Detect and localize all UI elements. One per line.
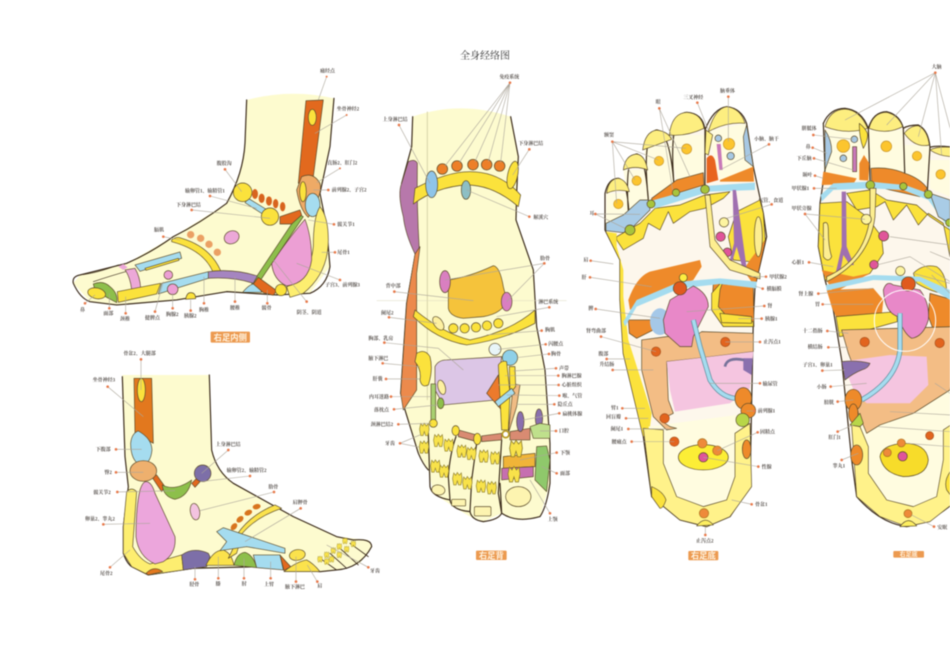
callout: 胼胝体: 胼胝体 [802,125,817,132]
callout: 甲状旁腺: 甲状旁腺 [792,205,812,212]
callout: 腹股沟: 腹股沟 [217,160,232,167]
callout: 眼: 眼 [656,98,661,105]
callout: 臂1: 臂1 [611,404,619,411]
foot outline: sole [605,107,767,527]
callout: 子宫3、前列腺3: 子宫3、前列腺3 [325,282,360,289]
medial reflex zones [87,100,328,303]
callout: 隐丘点: 隐丘点 [558,401,574,408]
callout: 坐骨神经2 [315,106,360,133]
callout: 小脑、脑干 [720,136,779,170]
panel: right foot medial side [73,68,367,343]
callout: 腋下淋巴 [285,557,305,590]
callout: 髋关节1 [308,220,355,228]
second sole reflex zones [818,123,950,527]
callout: 肝囊 [373,376,420,383]
callout: 声带 [513,365,569,372]
callout: 膀胱: 膀胱 [824,399,834,406]
callout: 鼻: 鼻 [806,143,811,150]
callout: 颞叶: 颞叶 [802,172,812,179]
callout: 下丘脑: 下丘脑 [797,155,812,162]
callout: 额窦: 额窦 [603,132,614,139]
callout: 子宫1、卵巢1: 子宫1、卵巢1 [803,362,833,369]
callout: 脑垂体 [720,88,735,142]
callout: 胸骨: 胸骨 [551,351,561,358]
callout: 痛经点 [318,68,336,100]
callout: 牙齿 [327,545,380,574]
callout: 阴茎、阴道: 阴茎、阴道 [297,309,322,316]
callout: 直肠2、肛门2 [317,160,358,183]
callout: 睾丸1 [833,453,858,469]
callout: 腹部: 腹部 [598,351,608,358]
callout: 上颚: 上颚 [548,516,559,523]
callout: 固精点: 固精点 [760,428,776,435]
callout: 阑尾1: 阑尾1 [611,426,624,433]
callout: 三叉神经 [683,94,708,130]
callout: 胰腺2 [184,300,197,319]
callout: 颈淋巴结2: 颈淋巴结2 [371,421,394,428]
callout: 尾骨1 [322,249,350,256]
callout: 小肠: 小肠 [817,383,827,390]
callout: 升结肠 [599,361,653,371]
callout: 上臂 [264,562,274,588]
callout: 肋骨 [445,255,550,302]
callout: 面部 [542,467,570,477]
callout: 肩 [583,257,613,264]
callout: 下丘脑 [797,155,853,170]
callout: 直肠2、肛门2: 直肠2、肛门2 [327,160,358,167]
callout: 鼻: 鼻 [80,307,85,314]
callout: 膈肌 [154,227,180,240]
callout: 面部 [103,293,113,317]
callout: 解溪穴 [467,190,548,221]
callout: 输卵管1、输精管1: 输卵管1、输精管1 [185,188,225,195]
callout: 膀胱 [824,399,853,406]
callout: 口腔 [540,428,570,435]
tag: 右足底: 右足底 [691,551,716,561]
callout: 喉、气管: 喉、气管 [562,392,582,399]
callout: 上颚 [530,480,559,523]
callout: 肋骨 [200,484,278,511]
callout: 阑尾1 [611,426,668,433]
callout: 大脑 [845,63,950,155]
callout: 腹部 [598,351,630,360]
callout: 胸淋巴腺 [505,372,582,379]
callout: 下身淋巴结: 下身淋巴结 [176,202,201,209]
panel: cropped second sole [792,63,950,559]
callout: 卵巢2、睾丸2: 卵巢2、睾丸2 [85,516,115,523]
callout: 胼胝体 [802,125,853,139]
callout: 骨盆2、大腿部: 骨盆2、大腿部 [123,350,156,357]
callout: 额窦 [603,132,686,203]
callout: 下颚 [520,450,571,460]
callout: 胸肌: 胸肌 [545,327,555,334]
foot outline: second sole [818,108,950,527]
callout: 脾: 脾 [588,305,593,312]
callout: 胸椎: 胸椎 [199,307,209,314]
callout: 淋巴系统 [497,298,559,317]
callout: 肋骨: 肋骨 [268,484,278,491]
callout: 止泻点2 [696,527,714,544]
tag: 右足底 second sole [893,551,924,559]
callout: 大脑: 大脑 [932,63,942,70]
callout: 喉、气管 [507,392,582,399]
callout: 安眠: 安眠 [937,524,947,531]
callout: 肾弯曲部 [586,327,656,352]
callout: 淋巴系统: 淋巴系统 [538,298,559,305]
callout: 耳 [589,210,640,228]
callout: 胰腺1: 胰腺1 [765,316,778,323]
callout: 胫骨 [189,567,199,588]
callout: 落枕点: 落枕点 [374,407,390,414]
callout: 输卵管2、输精管2 [200,467,267,482]
callout: 气管、食道: 气管、食道 [758,197,783,204]
callout: 睾丸1: 睾丸1 [833,462,846,469]
callout: 子宫3、前列腺3 [297,263,360,289]
callout: 升结肠: 升结肠 [599,361,614,368]
callout: 面部: 面部 [560,470,570,477]
callout: 颈淋巴结2 [371,421,432,428]
callout: 肩 [307,565,322,590]
callout: 腹股沟 [217,160,242,192]
callout: 腋下淋巴 [368,355,420,367]
callout: 阴茎、阴道 [273,260,322,316]
callout: 胸部、乳房: 胸部、乳房 [368,335,393,342]
dorsal reflex zones [400,159,550,516]
callout: 上臂: 上臂 [264,581,274,588]
callout: 横膈膜 [755,286,782,293]
callout: 肋骨: 肋骨 [540,255,550,262]
callout: 牙齿: 牙齿 [370,567,380,574]
foot outline: lateral [122,375,372,575]
callout: 阑尾2: 阑尾2 [381,309,394,316]
callout: 上身淋巴结: 上身淋巴结 [216,441,241,448]
callout: 下腹部: 下腹部 [96,446,111,453]
callout: 甲状旁腺 [792,205,865,240]
panel: right foot lateral side [85,350,380,590]
callout: 髋骨 [262,290,272,311]
callout: 心脏组织 [498,382,583,389]
panel: right foot sole [582,88,787,561]
callout: 臂1 [611,404,645,411]
callout: 内耳迷路: 内耳迷路 [369,393,389,400]
callout: 坐骨神经2: 坐骨神经2 [337,106,360,113]
callout: 肩胛骨: 肩胛骨 [293,499,308,506]
callout: 髋关节2: 髋关节2 [93,489,111,496]
callout: 鼻 [80,295,95,314]
callout: 肾弯曲部: 肾弯曲部 [586,327,606,334]
callout: 肘: 肘 [242,580,247,587]
callout: 尾骨2: 尾骨2 [100,570,113,577]
callout: 脑垂体: 脑垂体 [720,88,735,95]
callout: 胸部、乳房 [368,335,463,370]
callout: 止泻点1 [725,338,781,345]
callout: 三叉神经: 三叉神经 [683,94,704,101]
callout: 口腔: 口腔 [559,428,570,435]
callout: 心脏组织: 心脏组织 [562,382,583,389]
callout: 腋下淋巴: 腋下淋巴 [368,355,388,362]
callout: 落枕点 [374,405,438,414]
callout: 腋下淋巴: 腋下淋巴 [285,583,305,590]
panel: right foot dorsal side [368,73,583,560]
callout: 髋关节2 [93,489,175,496]
tag: 右足底 second sole: 右足底 [900,551,918,559]
callout: 甲状腺1 [792,185,837,192]
callout: 背中部 [386,282,473,301]
callout: 肩胛骨 [245,499,308,542]
callout: 肘 [242,558,247,587]
callout: 腰椎: 腰椎 [230,304,240,311]
callout: 背中部: 背中部 [386,282,401,289]
callout: 健脾点 [145,282,163,321]
callout: 胰腺1 [738,316,778,323]
callout: 输尿管: 输尿管 [763,380,778,387]
callout: 胸椎 [199,277,209,314]
callout: 胃: 胃 [815,301,820,308]
callout: 甲状腺2: 甲状腺2 [769,273,787,280]
callout: 心脏1: 心脏1 [792,259,805,266]
callout: 性腺: 性腺 [762,464,772,471]
tag: 右足内侧: 右足内侧 [214,332,247,342]
callout: 免疫系统: 免疫系统 [499,73,520,80]
callout: 肛门1: 肛门1 [828,434,841,441]
callout: 膝: 膝 [216,580,222,587]
callout: 肾上腺: 肾上腺 [798,290,813,297]
callout: 臀2: 臀2 [104,469,112,476]
callout: 心脏1 [792,259,833,267]
foot outline: dorsal [377,108,567,522]
callout: 胫骨: 胫骨 [189,581,199,588]
callout: 上身淋巴结 [202,441,241,473]
tag: 右足背: 右足背 [479,550,504,560]
callout: 脾 [588,305,660,318]
callout: 颈椎 [120,297,130,323]
callout: 输卵管2、输精管2: 输卵管2、输精管2 [227,467,267,474]
callout: 卵巢2、睾丸2 [85,516,150,526]
callout: 免疫系统 [445,73,520,166]
callout: 颈椎: 颈椎 [120,316,130,323]
callout: 下颚: 下颚 [560,450,571,457]
sole reflex zones [606,125,765,527]
callout: 髋骨: 髋骨 [262,304,272,311]
callout: 腰椎 [230,277,240,311]
callout: 横膈膜: 横膈膜 [767,286,782,293]
callout: 前列腺1: 前列腺1 [758,408,776,415]
callout: 肝: 肝 [582,274,587,281]
callout: 面部: 面部 [103,310,113,317]
callout: 颞叶 [802,172,823,179]
callout: 回盲瓣: 回盲瓣 [606,414,621,421]
callout: 耳: 耳 [589,210,594,217]
callout: 甲状腺1: 甲状腺1 [792,185,810,192]
callout: 固精点 [717,428,776,451]
callout: 甲状腺2 [750,273,787,280]
callout: 闪腰点 [498,341,564,349]
callout: 骨盆2、大腿部 [123,350,156,390]
callout: 髋关节1: 髋关节1 [337,221,355,228]
callout: 下腹部 [96,446,142,453]
callout: 胃 [815,301,873,308]
callout: 胸骨 [517,351,561,358]
callout: 横结肠: 横结肠 [808,343,823,350]
callout: 尾骨2 [100,550,130,577]
callout: 胸肌 [487,327,555,335]
callout: 臀2 [104,469,143,476]
callout: 下身淋巴结: 下身淋巴结 [518,140,543,147]
callout: 横结肠 [808,343,848,350]
callout: 胸腺2 [166,293,179,318]
callout: 膝 [216,557,222,587]
callout: 肝囊: 肝囊 [373,376,383,383]
callout: 十二指肠: 十二指肠 [803,328,823,335]
callout: 子宫1、卵巢1 [803,362,845,372]
callout: 阑尾2 [381,309,437,323]
callout: 肾上腺 [798,288,873,297]
callout: 气管、食道 [727,197,783,218]
callout: 腰痛点: 腰痛点 [612,438,628,445]
callout: 骨盆1 [732,500,768,508]
callout: 鼻 [806,143,827,153]
callout: 牙齿: 牙齿 [385,440,395,447]
callout: 止泻点1: 止泻点1 [763,338,781,345]
callout: 膈肌: 膈肌 [154,227,164,234]
callout: 肝 [582,274,652,287]
callout: 痛经点: 痛经点 [320,68,336,75]
callout: 肾: 肾 [767,303,772,310]
callout: 输卵管1、输精管1 [185,188,257,208]
callout: 前列腺2、子宫2: 前列腺2、子宫2 [332,187,367,194]
callout: 腰痛点 [612,438,674,445]
foot outline: medial [73,94,334,305]
callout: 下身淋巴结 [513,140,543,175]
callout: 隐丘点 [517,401,574,408]
callout: 坐骨神经3 [93,377,143,417]
callout: 肾 [687,303,772,312]
callout: 牙齿 [385,435,420,447]
callout: 肩: 肩 [317,583,322,590]
callout: 小肠 [817,383,867,390]
callout: 扁桃体腺: 扁桃体腺 [562,410,582,417]
callout: 十二指肠 [803,328,848,335]
callout: 性腺 [703,457,772,471]
callout: 扁桃体腺 [523,410,582,420]
callout: 上身淋巴结: 上身淋巴结 [383,116,408,123]
callout: 输尿管 [710,380,778,387]
callout: 内耳迷路 [369,393,433,400]
callout: 小脑、脑干: 小脑、脑干 [754,136,779,143]
callout: 骨盆1: 骨盆1 [755,501,768,508]
callout: 肩: 肩 [583,257,588,264]
callout: 安眠 [912,515,947,531]
callout: 下身淋巴结 [176,202,270,218]
callout: 胸淋巴腺: 胸淋巴腺 [562,372,582,379]
callout: 尾骨1: 尾骨1 [337,249,350,256]
callout: 眼 [656,98,690,190]
callout: 健脾点: 健脾点 [145,314,161,321]
callout: 回盲瓣 [606,414,648,421]
callout: 胰腺2: 胰腺2 [184,312,197,319]
callout: 前列腺1 [747,408,776,415]
callout: 解溪穴: 解溪穴 [533,214,548,221]
callout: 止泻点2: 止泻点2 [696,537,714,544]
callout: 坐骨神经3: 坐骨神经3 [93,377,116,384]
callout: 肛门1 [828,425,853,441]
lateral reflex zones [123,378,356,575]
callout: 闪腰点: 闪腰点 [548,341,564,348]
callout: 胸腺2: 胸腺2 [166,311,179,318]
callout: 上身淋巴结 [383,116,430,183]
callout: 前列腺2、子宫2 [313,187,367,194]
callout: 声带: 声带 [559,365,569,372]
title: 全身经络图 [460,49,510,62]
